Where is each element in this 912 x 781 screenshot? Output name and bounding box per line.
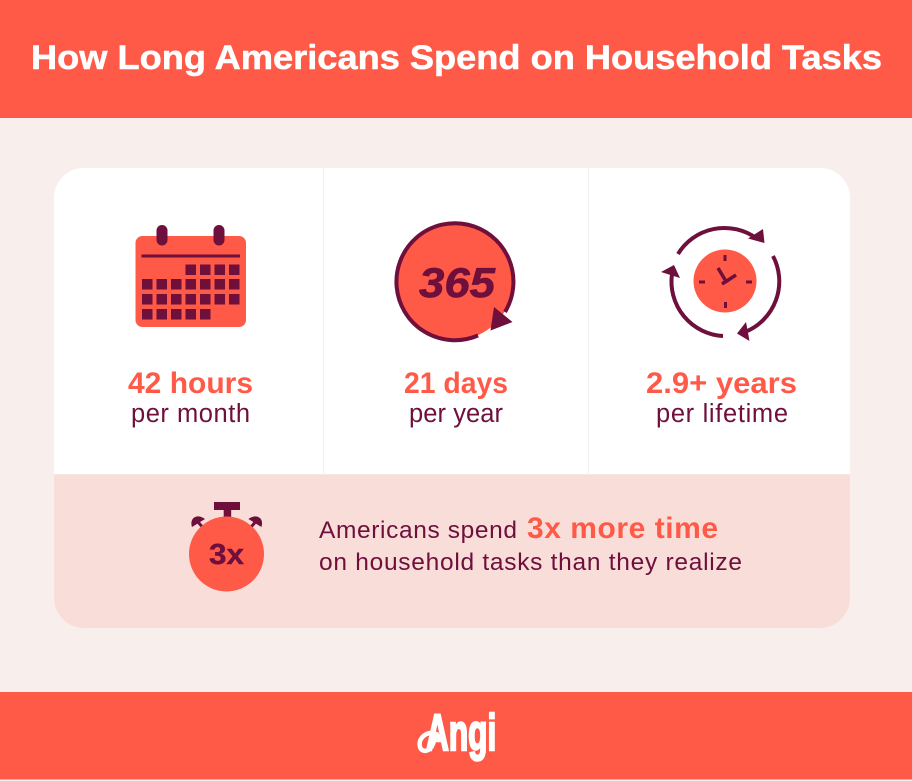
- stat: 2.9+ years: 2.9+ years: [646, 367, 797, 400]
- callout: 3x more time: [189, 502, 742, 592]
- stat: 21 days: 21 days: [404, 367, 508, 400]
- panel: per lifetime: [646, 228, 797, 428]
- panel: per month: [128, 225, 253, 428]
- callout text line 2: on household tasks than they realize: [319, 549, 742, 576]
- icon: stopwatch: [189, 502, 264, 592]
- footer banner: [0, 692, 912, 780]
- icon: 365 circle arrow: 365: [419, 259, 496, 306]
- icon: clock with cycle arrows: [661, 228, 779, 341]
- callout highlight: 3x more time: [527, 512, 718, 545]
- icon: 365 circle arrow: [396, 223, 513, 340]
- logo: Angi: Angi: [426, 704, 496, 761]
- panel: per year: [396, 223, 513, 428]
- header banner: [0, 0, 912, 118]
- label: per month: per month: [131, 400, 250, 428]
- icon: stopwatch: 3x: [209, 539, 244, 571]
- label: per year: per year: [409, 400, 504, 428]
- label: per lifetime: per lifetime: [656, 400, 788, 428]
- callout text line 1: Americans spend: [319, 517, 517, 544]
- icon: calendar: [136, 225, 246, 327]
- panel: main card: [54, 168, 850, 628]
- stat: 42 hours: 42 hours: [128, 367, 253, 400]
- title: How Long Americans Spend on Household Tasks: [31, 39, 882, 77]
